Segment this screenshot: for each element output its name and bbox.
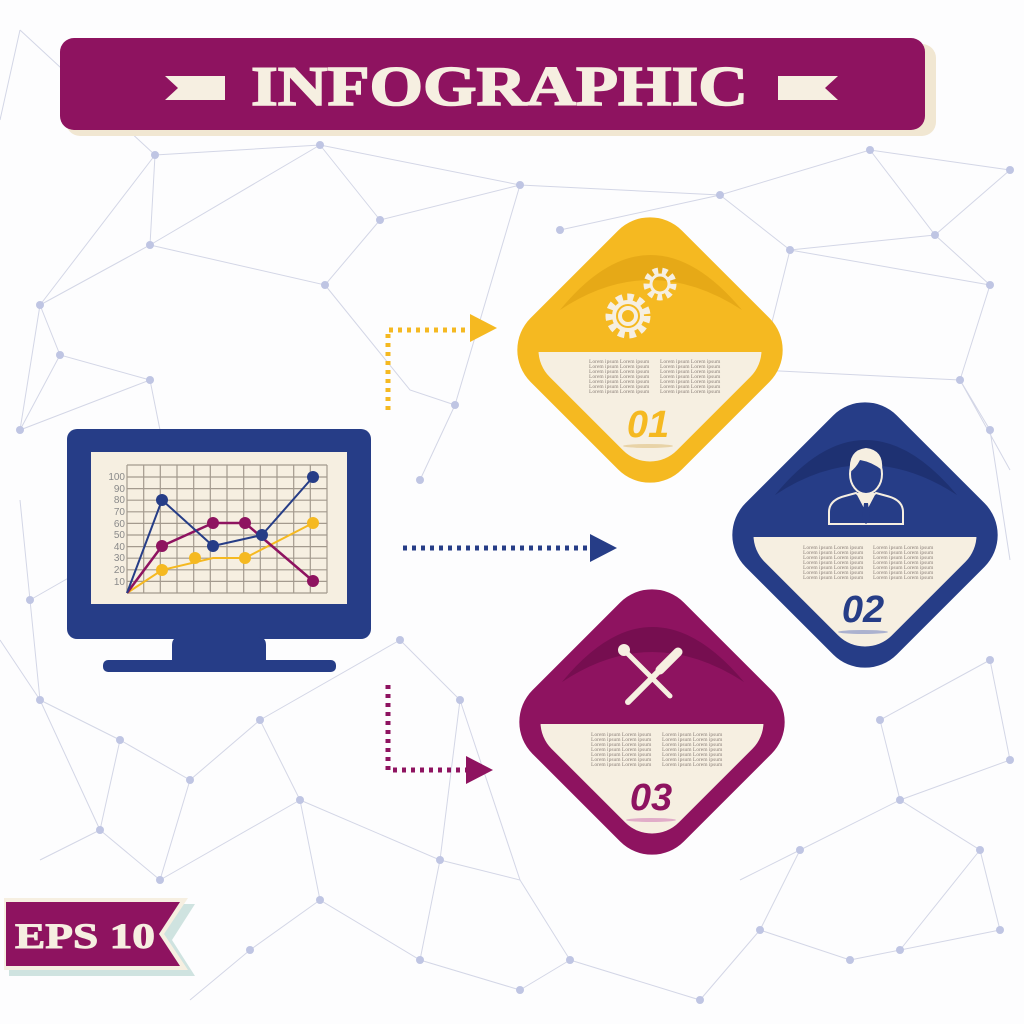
panel 02: blue diamond: Lorem ipsum Lorem ipsum [803, 575, 864, 581]
lorem text: Lorem ipsum Lorem ipsum [660, 389, 721, 395]
monitor with line chart: 90 [114, 484, 125, 495]
title banner [60, 38, 936, 136]
panel 02: blue diamond: Lorem ipsum Lorem ipsum [803, 550, 864, 556]
monitor with line chart: 80 [114, 495, 125, 506]
panel 02: blue diamond: Lorem ipsum Lorem ipsum [873, 555, 934, 561]
monitor with line chart: 30 [114, 553, 125, 564]
panel 03: purple diamond: Lorem ipsum Lorem ipsum [662, 732, 723, 738]
panel 02: blue diamond: 02 [842, 589, 884, 631]
panel 02: blue diamond: Lorem ipsum Lorem ipsum [803, 570, 864, 576]
arrow: yellow to 01 [388, 314, 497, 410]
panel 03: purple diamond: Lorem ipsum Lorem ipsum [662, 762, 723, 768]
arrow: blue to 02 [403, 534, 617, 562]
panel 03: purple diamond: Lorem ipsum Lorem ipsum [591, 752, 652, 758]
monitor with line chart: 20 [114, 565, 125, 576]
panel 03: purple diamond: Lorem ipsum Lorem ipsum [591, 737, 652, 743]
monitor with line chart: 60 [114, 519, 125, 530]
monitor with line chart: 50 [114, 530, 125, 541]
panel 03: purple diamond: Lorem ipsum Lorem ipsum [591, 732, 652, 738]
panel 02: blue diamond: Lorem ipsum Lorem ipsum [803, 545, 864, 551]
panel 03: purple diamond: Lorem ipsum Lorem ipsum [662, 742, 723, 748]
chart grid [127, 465, 327, 593]
panel 03: purple diamond: Lorem ipsum Lorem ipsum [591, 762, 652, 768]
lorem text [589, 359, 721, 395]
ribbon right [778, 76, 838, 100]
panel 02: blue diamond: Lorem ipsum Lorem ipsum [803, 565, 864, 571]
panel 03: purple diamond: Lorem ipsum Lorem ipsum [591, 757, 652, 763]
lorem text: Lorem ipsum Lorem ipsum [589, 369, 650, 375]
monitor with line chart [67, 429, 371, 672]
panel 02: blue diamond: Lorem ipsum Lorem ipsum [873, 565, 934, 571]
lorem text: Lorem ipsum Lorem ipsum [589, 379, 650, 385]
arrow: purple to 03 [388, 685, 493, 784]
lorem text: Lorem ipsum Lorem ipsum [660, 359, 721, 365]
EPS 10 tag [4, 898, 195, 976]
title text: INFOGRAPHIC [251, 56, 748, 118]
panel 03: purple diamond: Lorem ipsum Lorem ipsum [662, 737, 723, 743]
panel 03: purple diamond [519, 589, 785, 855]
panel 03: purple diamond: Lorem ipsum Lorem ipsum [591, 747, 652, 753]
panel 03: purple diamond: Lorem ipsum Lorem ipsum [591, 742, 652, 748]
lorem text: Lorem ipsum Lorem ipsum [660, 364, 721, 370]
panel 02: blue diamond: Lorem ipsum Lorem ipsum [873, 550, 934, 556]
panel 03: purple diamond: Lorem ipsum Lorem ipsum [662, 747, 723, 753]
panel 03: purple diamond: Lorem ipsum Lorem ipsum [662, 757, 723, 763]
monitor with line chart: 10 [114, 577, 125, 588]
icon: wrench and screwdriver [618, 644, 678, 702]
lorem text: Lorem ipsum Lorem ipsum [589, 374, 650, 380]
monitor with line chart: 70 [114, 507, 125, 518]
lorem text: Lorem ipsum Lorem ipsum [589, 359, 650, 365]
icon: businessman [829, 448, 903, 524]
ribbon left [165, 76, 225, 100]
lorem text: Lorem ipsum Lorem ipsum [660, 374, 721, 380]
lorem text: Lorem ipsum Lorem ipsum [660, 369, 721, 375]
lorem text: Lorem ipsum Lorem ipsum [660, 379, 721, 385]
icon: gears [610, 271, 673, 334]
lorem text: Lorem ipsum Lorem ipsum [589, 384, 650, 390]
EPS 10 tag: EPS 10 [15, 916, 155, 956]
panel 02: blue diamond: Lorem ipsum Lorem ipsum [803, 555, 864, 561]
lorem text: Lorem ipsum Lorem ipsum [589, 364, 650, 370]
panel 02: blue diamond [732, 402, 998, 668]
lorem text: Lorem ipsum Lorem ipsum [660, 384, 721, 390]
monitor with line chart: 40 [114, 542, 125, 553]
panel 02: blue diamond: Lorem ipsum Lorem ipsum [873, 575, 934, 581]
panel 02: blue diamond: Lorem ipsum Lorem ipsum [873, 545, 934, 551]
number 01: 01 [627, 404, 669, 446]
panel 03: purple diamond: Lorem ipsum Lorem ipsum [662, 752, 723, 758]
panel 03: purple diamond: 03 [630, 777, 672, 819]
panel 02: blue diamond: Lorem ipsum Lorem ipsum [803, 560, 864, 566]
lorem text: Lorem ipsum Lorem ipsum [589, 389, 650, 395]
panel 02: blue diamond: Lorem ipsum Lorem ipsum [873, 570, 934, 576]
panel 02: blue diamond: Lorem ipsum Lorem ipsum [873, 560, 934, 566]
panel 01: yellow diamond [517, 217, 783, 483]
monitor with line chart: 100 [108, 472, 125, 483]
